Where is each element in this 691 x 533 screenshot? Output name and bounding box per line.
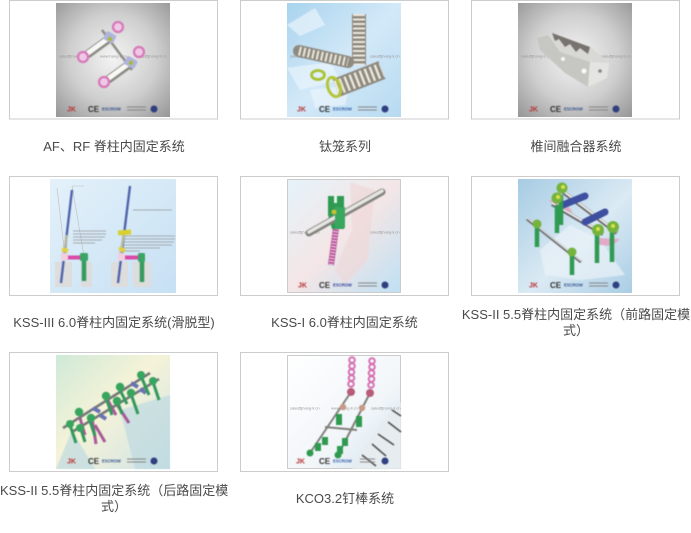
caption: KSS-II anterior: KSS-II 5.5脊柱内固定系统（前路固定模 [462, 307, 690, 322]
panel: titanium cage series: sale@jhang-li.cn [290, 54, 320, 58]
panel: interbody fusion cage: www.hang-li.cn [562, 54, 589, 58]
panel: AF RF system: sale@jhang-li.cn [59, 54, 89, 58]
icon: certification logos: JK [529, 106, 538, 114]
icon: pedicle screw and rod [309, 191, 382, 265]
panel: KSS-I system: sale@jhang-li.cn [290, 230, 320, 234]
icon: certification logos: CE [88, 457, 100, 466]
caption: interbody fusion cage: 椎间融合器系统 [530, 139, 622, 154]
panel: KSS-II posterior system [10, 352, 218, 472]
icon: certification logos: CE [550, 105, 562, 114]
caption: titanium cage: 钛笼系列 [319, 139, 371, 154]
icon: certification logos: ESCROW [102, 106, 121, 112]
panel: titanium cage series [240, 0, 448, 119]
panel: KCO3.2 rod system: sale@jhang-li.cn [371, 406, 401, 410]
icon: certification logos: CE [319, 457, 331, 466]
icon: certification logos: ESCROW [102, 458, 121, 464]
icon: certification logos [529, 281, 620, 290]
caption: KSS-II posterior: KSS-II 5.5脊柱内固定系统（后路固定模 [0, 483, 228, 498]
icon: certification logos [67, 457, 158, 466]
icon: certification logos [67, 105, 158, 114]
icon: certification logos: JK [529, 282, 538, 290]
caption: KSS-II posterior: 式） [101, 499, 127, 514]
panel: KSS-I system [240, 176, 448, 296]
icon: certification logos: ESCROW [333, 282, 352, 288]
icon: certification logos: JK [67, 458, 76, 466]
icon: certification logos: CE [550, 281, 562, 290]
icon: certification logos: JK [298, 282, 307, 290]
icon: fusion cage implant [537, 33, 609, 87]
panel: titanium cage series: sale@jhang-li.cn [370, 54, 400, 58]
icon: fixation device [78, 22, 144, 87]
icon: certification logos [296, 457, 388, 466]
panel: KCO3.2 rod system: www.hang-li.cn [331, 406, 358, 410]
panel: KSS-II anterior system [472, 176, 680, 296]
caption: KCO3.2: KCO3.2钉棒系统 [296, 491, 394, 506]
icon: certification logos: JK [67, 106, 76, 114]
icon: anterior fixation assembly [527, 182, 620, 275]
icon: certification logos: ESCROW [333, 106, 352, 112]
caption: KSS-I: KSS-I 6.0脊柱内固定系统 [271, 315, 418, 330]
icon: certification logos [298, 281, 388, 290]
panel: interbody fusion cage [472, 0, 680, 119]
icon: certification logos [297, 105, 388, 114]
icon: certification logos [529, 105, 620, 114]
panel: interbody fusion cage: sale@jhang-li.cn [521, 54, 551, 58]
caption: KSS-III: KSS-III 6.0脊柱内固定系统(滑脱型) [13, 315, 215, 330]
icon: certification logos: ESCROW [333, 458, 352, 464]
panel: KCO3.2 rod system: sale@jhang-li.cn [290, 406, 320, 410]
panel: KSS-III sliding system [10, 176, 218, 296]
icon: reduction rods and screws [61, 186, 145, 283]
icon: certification logos: CE [319, 281, 331, 290]
caption: KSS-II anterior [462, 307, 690, 338]
panel: AF RF system: www.hang-li.cn [100, 54, 127, 58]
caption: KSS-II posterior [0, 483, 228, 514]
icon: certification logos: ESCROW [564, 282, 583, 288]
panel: KSS-I system: sale@jhang-li.cn [370, 230, 400, 234]
icon: titanium mesh cages [299, 14, 382, 98]
caption: AF RF system: AF、RF 脊柱内固定系统 [43, 139, 185, 154]
panel: KCO3.2 rod system [240, 352, 448, 472]
icon: certification logos: CE [319, 105, 331, 114]
icon: certification logos: ESCROW [564, 106, 583, 112]
icon: certification logos: JK [296, 458, 305, 466]
icon: hook and rod chains [306, 357, 375, 458]
panel: AF RF system [10, 0, 218, 119]
icon: certification logos: CE [88, 105, 100, 114]
caption: KSS-II anterior: 式） [563, 323, 589, 338]
panel: interbody fusion cage: sale@jhang-li.cn [601, 54, 631, 58]
panel: AF RF system: sale@jhang-li.cn [137, 54, 167, 58]
icon: posterior fixation assembly [63, 371, 159, 444]
icon: certification logos: JK [297, 106, 306, 114]
